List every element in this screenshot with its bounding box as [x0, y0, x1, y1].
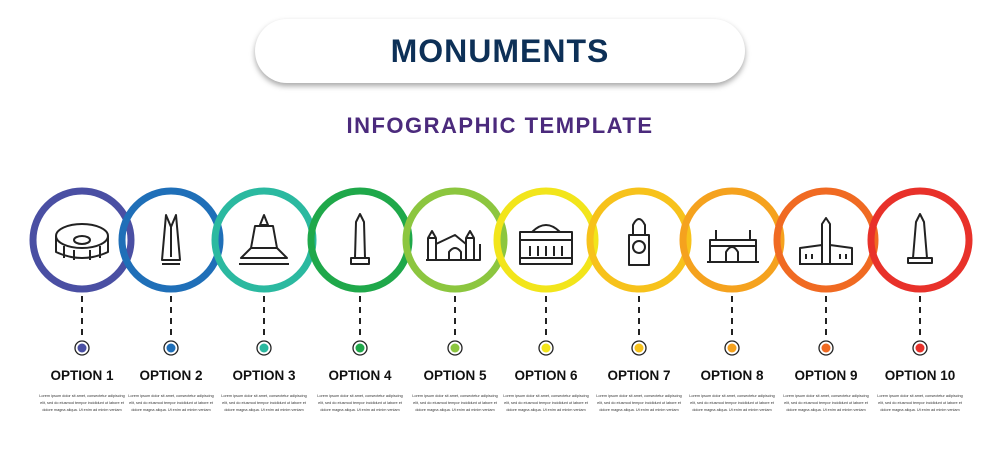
text: Lorem ipsum dolor sit amet, consectetur adipiscing: [596, 394, 682, 398]
text: elit, sed do eiusmod tempor incididunt ut labore et: [222, 401, 306, 405]
text: dolore magna aliqua. Ut enim ad minim veniam: [42, 408, 122, 412]
option 4: obelisk: [311, 191, 409, 355]
text: dolore magna aliqua. Ut enim ad minim veniam: [880, 408, 960, 412]
text: elit, sed do eiusmod tempor incididunt ut labore et: [878, 401, 962, 405]
text: elit, sed do eiusmod tempor incididunt ut labore et: [597, 401, 681, 405]
option 2: tower: [122, 191, 220, 355]
text: Lorem ipsum dolor sit amet, consectetur adipiscing: [39, 394, 125, 398]
text: elit, sed do eiusmod tempor incididunt ut labore et: [784, 401, 868, 405]
text: OPTION 1: [50, 368, 114, 383]
option 9: city hall: [777, 191, 875, 355]
descriptions: [39, 394, 963, 412]
text: OPTION 5: [423, 368, 486, 383]
text: dolore magna aliqua. Ut enim ad minim veniam: [224, 408, 304, 412]
text: OPTION 10: [885, 368, 955, 383]
option 8: gateway: [683, 191, 781, 355]
option 1: stadium: [33, 191, 131, 355]
text: dolore magna aliqua. Ut enim ad minim veniam: [692, 408, 772, 412]
title: [255, 19, 745, 83]
text: Lorem ipsum dolor sit amet, consectetur adipiscing: [317, 394, 403, 398]
subtitle: INFOGRAPHIC TEMPLATE: [346, 113, 654, 138]
text: elit, sed do eiusmod tempor incididunt ut labore et: [129, 401, 213, 405]
option 7: clock tower: [590, 191, 688, 355]
text: elit, sed do eiusmod tempor incididunt ut labore et: [413, 401, 497, 405]
option 5: castle: [406, 191, 504, 355]
text: dolore magna aliqua. Ut enim ad minim veniam: [786, 408, 866, 412]
text: Lorem ipsum dolor sit amet, consectetur adipiscing: [412, 394, 498, 398]
text: dolore magna aliqua. Ut enim ad minim veniam: [320, 408, 400, 412]
text: elit, sed do eiusmod tempor incididunt ut labore et: [318, 401, 402, 405]
text: Lorem ipsum dolor sit amet, consectetur adipiscing: [221, 394, 307, 398]
labels: [50, 368, 955, 383]
text: OPTION 4: [328, 368, 392, 383]
text: Lorem ipsum dolor sit amet, consectetur adipiscing: [689, 394, 775, 398]
text: OPTION 6: [514, 368, 578, 383]
text: elit, sed do eiusmod tempor incididunt ut labore et: [504, 401, 588, 405]
text: OPTION 9: [794, 368, 858, 383]
text: dolore magna aliqua. Ut enim ad minim veniam: [506, 408, 586, 412]
option 3: stupa: [215, 191, 313, 355]
text: elit, sed do eiusmod tempor incididunt ut labore et: [690, 401, 774, 405]
text: Lorem ipsum dolor sit amet, consectetur adipiscing: [783, 394, 869, 398]
text: OPTION 8: [700, 368, 764, 383]
text: dolore magna aliqua. Ut enim ad minim veniam: [415, 408, 495, 412]
text: OPTION 7: [607, 368, 670, 383]
option 10: obelisk: [871, 191, 969, 355]
text: OPTION 3: [232, 368, 296, 383]
title: MONUMENTS: [391, 32, 609, 68]
text: OPTION 2: [139, 368, 202, 383]
text: Lorem ipsum dolor sit amet, consectetur adipiscing: [128, 394, 214, 398]
text: Lorem ipsum dolor sit amet, consectetur adipiscing: [877, 394, 963, 398]
text: elit, sed do eiusmod tempor incididunt ut labore et: [40, 401, 124, 405]
text: Lorem ipsum dolor sit amet, consectetur adipiscing: [503, 394, 589, 398]
text: dolore magna aliqua. Ut enim ad minim veniam: [599, 408, 679, 412]
text: dolore magna aliqua. Ut enim ad minim veniam: [131, 408, 211, 412]
option 6: dome building: [497, 191, 595, 355]
